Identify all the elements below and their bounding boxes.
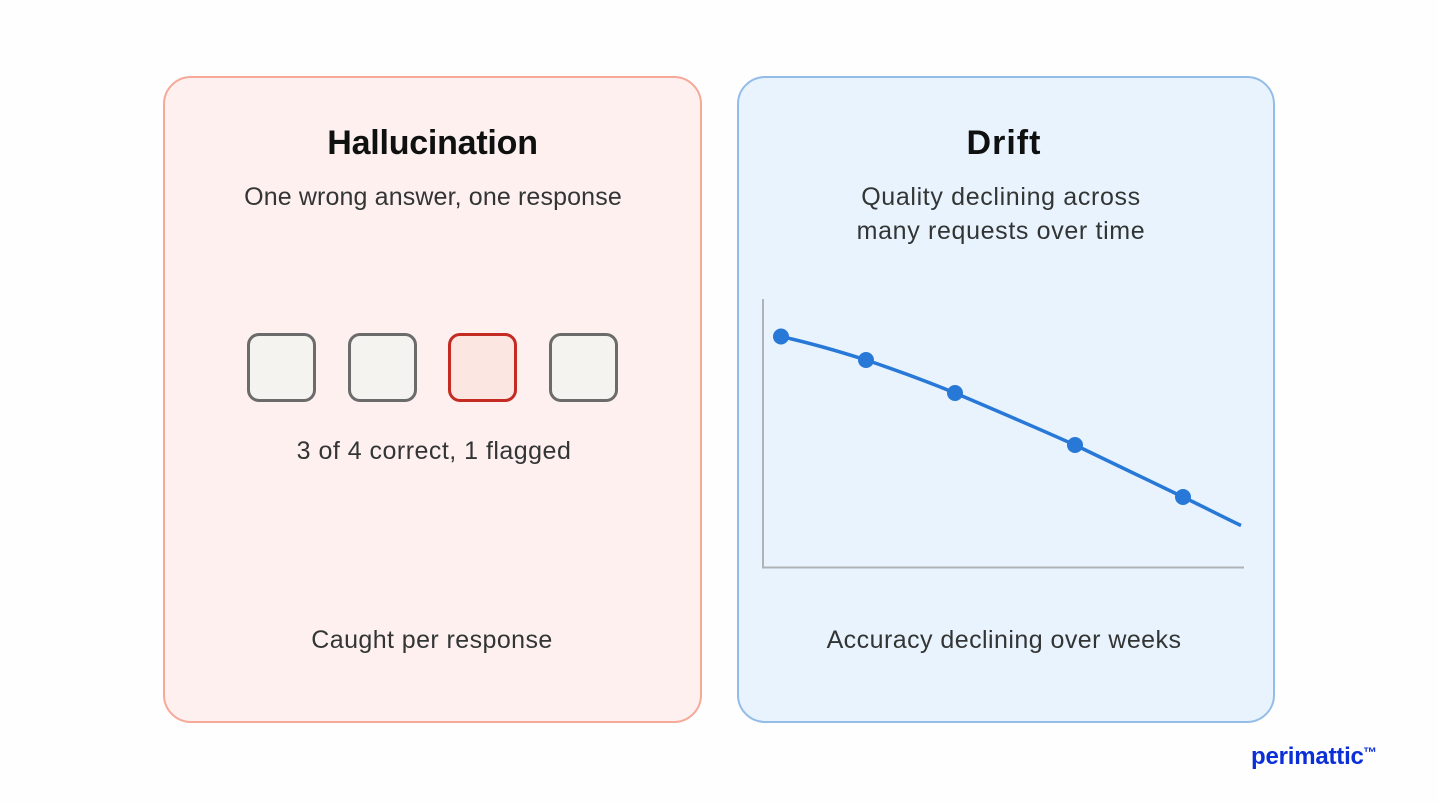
text: drift footer: Accuracy declining over weeks (827, 626, 1181, 654)
text: drift subtitle: many requests over time (857, 217, 1145, 245)
response box 4 (549, 333, 618, 402)
heading: Drift: Drift (967, 124, 1041, 162)
logo: perimattic: perimattic (1251, 743, 1364, 770)
text: drift subtitle (857, 183, 1145, 245)
response box 1 (247, 333, 316, 402)
text: hallucination subtitle: One wrong answer, one response (244, 183, 622, 211)
response box 3 flagged (448, 333, 517, 402)
response box 2 (348, 333, 417, 402)
text: ™ (1363, 744, 1377, 760)
text: drift subtitle: Quality declining across (861, 183, 1141, 211)
panel: drift (737, 76, 1275, 723)
heading: Hallucination: Hallucination (327, 124, 538, 162)
panel: hallucination (163, 76, 702, 723)
text: hallucination footer: Caught per response (311, 626, 553, 654)
line chart: quality declining (762, 299, 1244, 568)
text: box caption: 3 of 4 correct, 1 flagged (297, 437, 571, 465)
